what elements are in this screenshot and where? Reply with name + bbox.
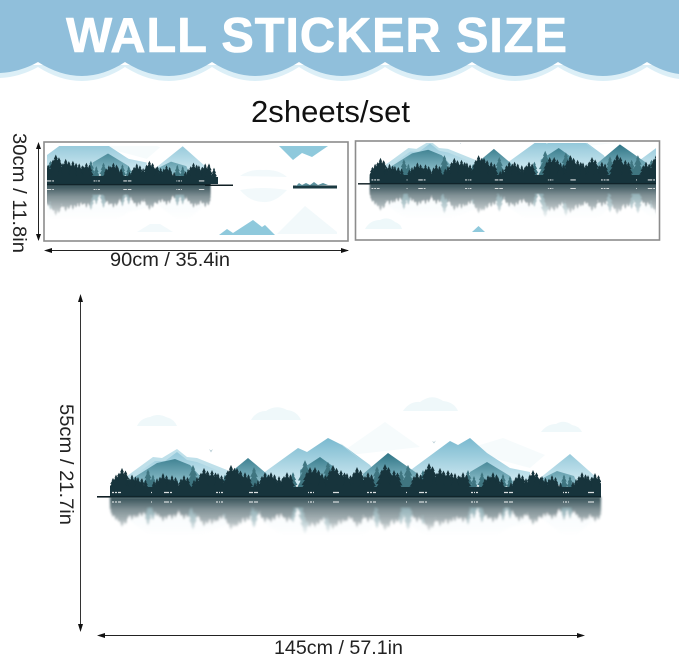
banner scallop edge [0, 65, 679, 81]
panel: sheet 1 [43, 141, 349, 242]
full height arrow [78, 294, 83, 632]
sheet 1 frame [44, 142, 348, 241]
full width arrow [97, 633, 585, 638]
sheet 1 bottom mountain piece [219, 220, 275, 235]
banner fill [0, 0, 679, 76]
height arrow [36, 142, 41, 241]
subtitle: 2sheets/set [251, 94, 410, 129]
full height label: 55cm / 21.7in [55, 404, 77, 525]
sheet 2 frame [356, 141, 660, 240]
full width dimension [97, 633, 585, 657]
sheet 1 pale shapes [137, 170, 337, 234]
sheet 1 top mountain piece [279, 146, 328, 160]
sheet 2 forest scene [358, 143, 656, 216]
sheet 1 forest scene [47, 146, 233, 216]
header banner [0, 0, 679, 81]
large forest panorama [97, 397, 604, 557]
title: WALL STICKER SIZE [66, 9, 567, 63]
sheet 2 cloud [365, 218, 402, 229]
width label: 90cm / 35.4in [110, 249, 230, 271]
sheet 2 small mountain [472, 226, 485, 232]
width arrow [44, 248, 349, 253]
sheet 1 island strip [293, 182, 337, 188]
sheet height dimension [8, 133, 41, 253]
full height dimension [55, 294, 83, 632]
sheet width dimension [44, 248, 349, 271]
panel: sheet 2 [354, 140, 660, 241]
height label: 30cm / 11.8in [8, 133, 30, 253]
